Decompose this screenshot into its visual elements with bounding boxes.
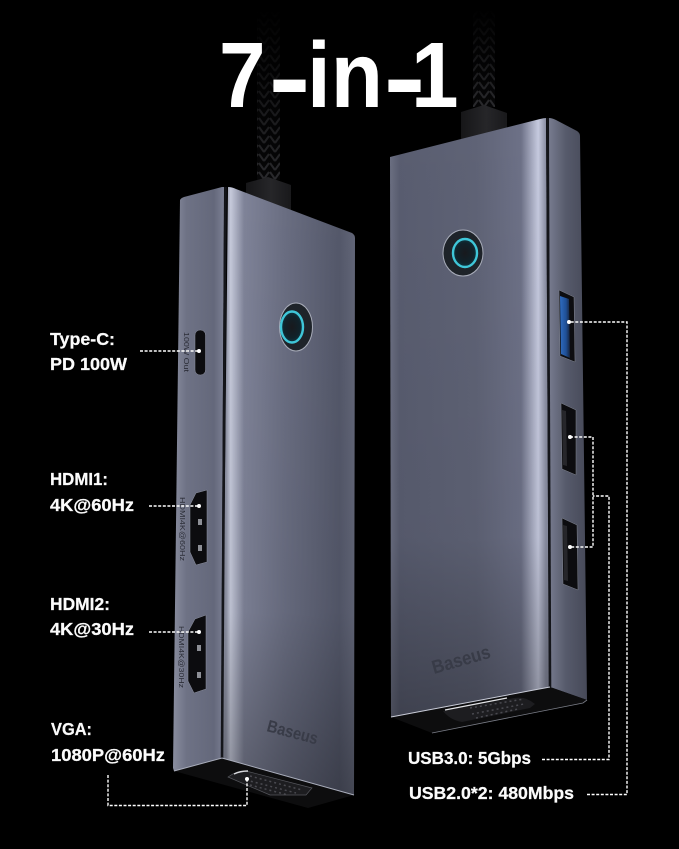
port: USB 3.0: [559, 290, 575, 362]
port: HDMI 1: HDMI4K@60Hz: [178, 497, 185, 562]
port: HDMI 1: [178, 490, 207, 565]
power button: right hub: [443, 230, 483, 276]
VGA port: right hub: [443, 698, 535, 722]
left hub device: [173, 177, 355, 808]
callout: USB2.0: USB2.0*2: 480Mbps: [409, 783, 574, 803]
seam: right hub: [548, 118, 550, 687]
front face: right hub: [390, 118, 549, 717]
cable: right hub: [473, 10, 495, 107]
logo: left hub: Baseus: [265, 717, 320, 748]
callout: VGA: [51, 719, 249, 806]
cable: left hub: [257, 10, 280, 180]
logo: right hub: Baseus: [430, 642, 493, 679]
connector: right hub: [461, 105, 507, 143]
port: USB 2.0 top: [561, 403, 576, 475]
callout: HDMI1: [50, 469, 201, 515]
front face: left hub: [222, 187, 355, 795]
title: -: [384, 19, 426, 135]
title: 1: [411, 23, 459, 127]
port: Type-C: 100W Out: [182, 332, 189, 372]
callout: VGA: 1080P@60Hz: [51, 745, 165, 765]
callout: VGA: VGA:: [51, 719, 92, 739]
title: 7: [219, 23, 266, 127]
callout: USB3.0: USB3.0: 5Gbps: [408, 748, 531, 768]
callout: HDMI2: [50, 594, 201, 639]
VGA port: left hub: [228, 771, 312, 795]
side face: right hub: [549, 118, 587, 700]
right hub device: [390, 105, 587, 733]
port: Type-C: [182, 330, 206, 375]
callout: HDMI1: 4K@60Hz: [50, 495, 134, 515]
callout: USB2.0: [409, 320, 627, 803]
callout: HDMI2: 4K@30Hz: [50, 619, 134, 639]
title: [219, 19, 459, 135]
port: HDMI 2: HDMI4K@30Hz: [177, 626, 184, 689]
bottom face: left hub: [174, 758, 354, 808]
callout: Type-C: [50, 329, 201, 374]
power button: left hub: [280, 303, 312, 351]
callout: Type-C: PD 100W: [50, 354, 127, 374]
callout: USB3.0: [408, 435, 609, 768]
callout: HDMI2: HDMI2:: [50, 594, 110, 614]
port: HDMI 2: [177, 615, 206, 693]
connector: left hub: [246, 177, 291, 212]
callout: HDMI1: HDMI1:: [50, 469, 108, 489]
title: in: [307, 23, 383, 127]
seam: left hub: [222, 187, 226, 758]
side face: left hub: [173, 187, 224, 771]
callout: Type-C: Type-C:: [50, 329, 115, 349]
port: USB 2.0 bottom: [562, 518, 578, 590]
title: -: [268, 19, 311, 135]
bottom face: right hub: [391, 687, 587, 733]
